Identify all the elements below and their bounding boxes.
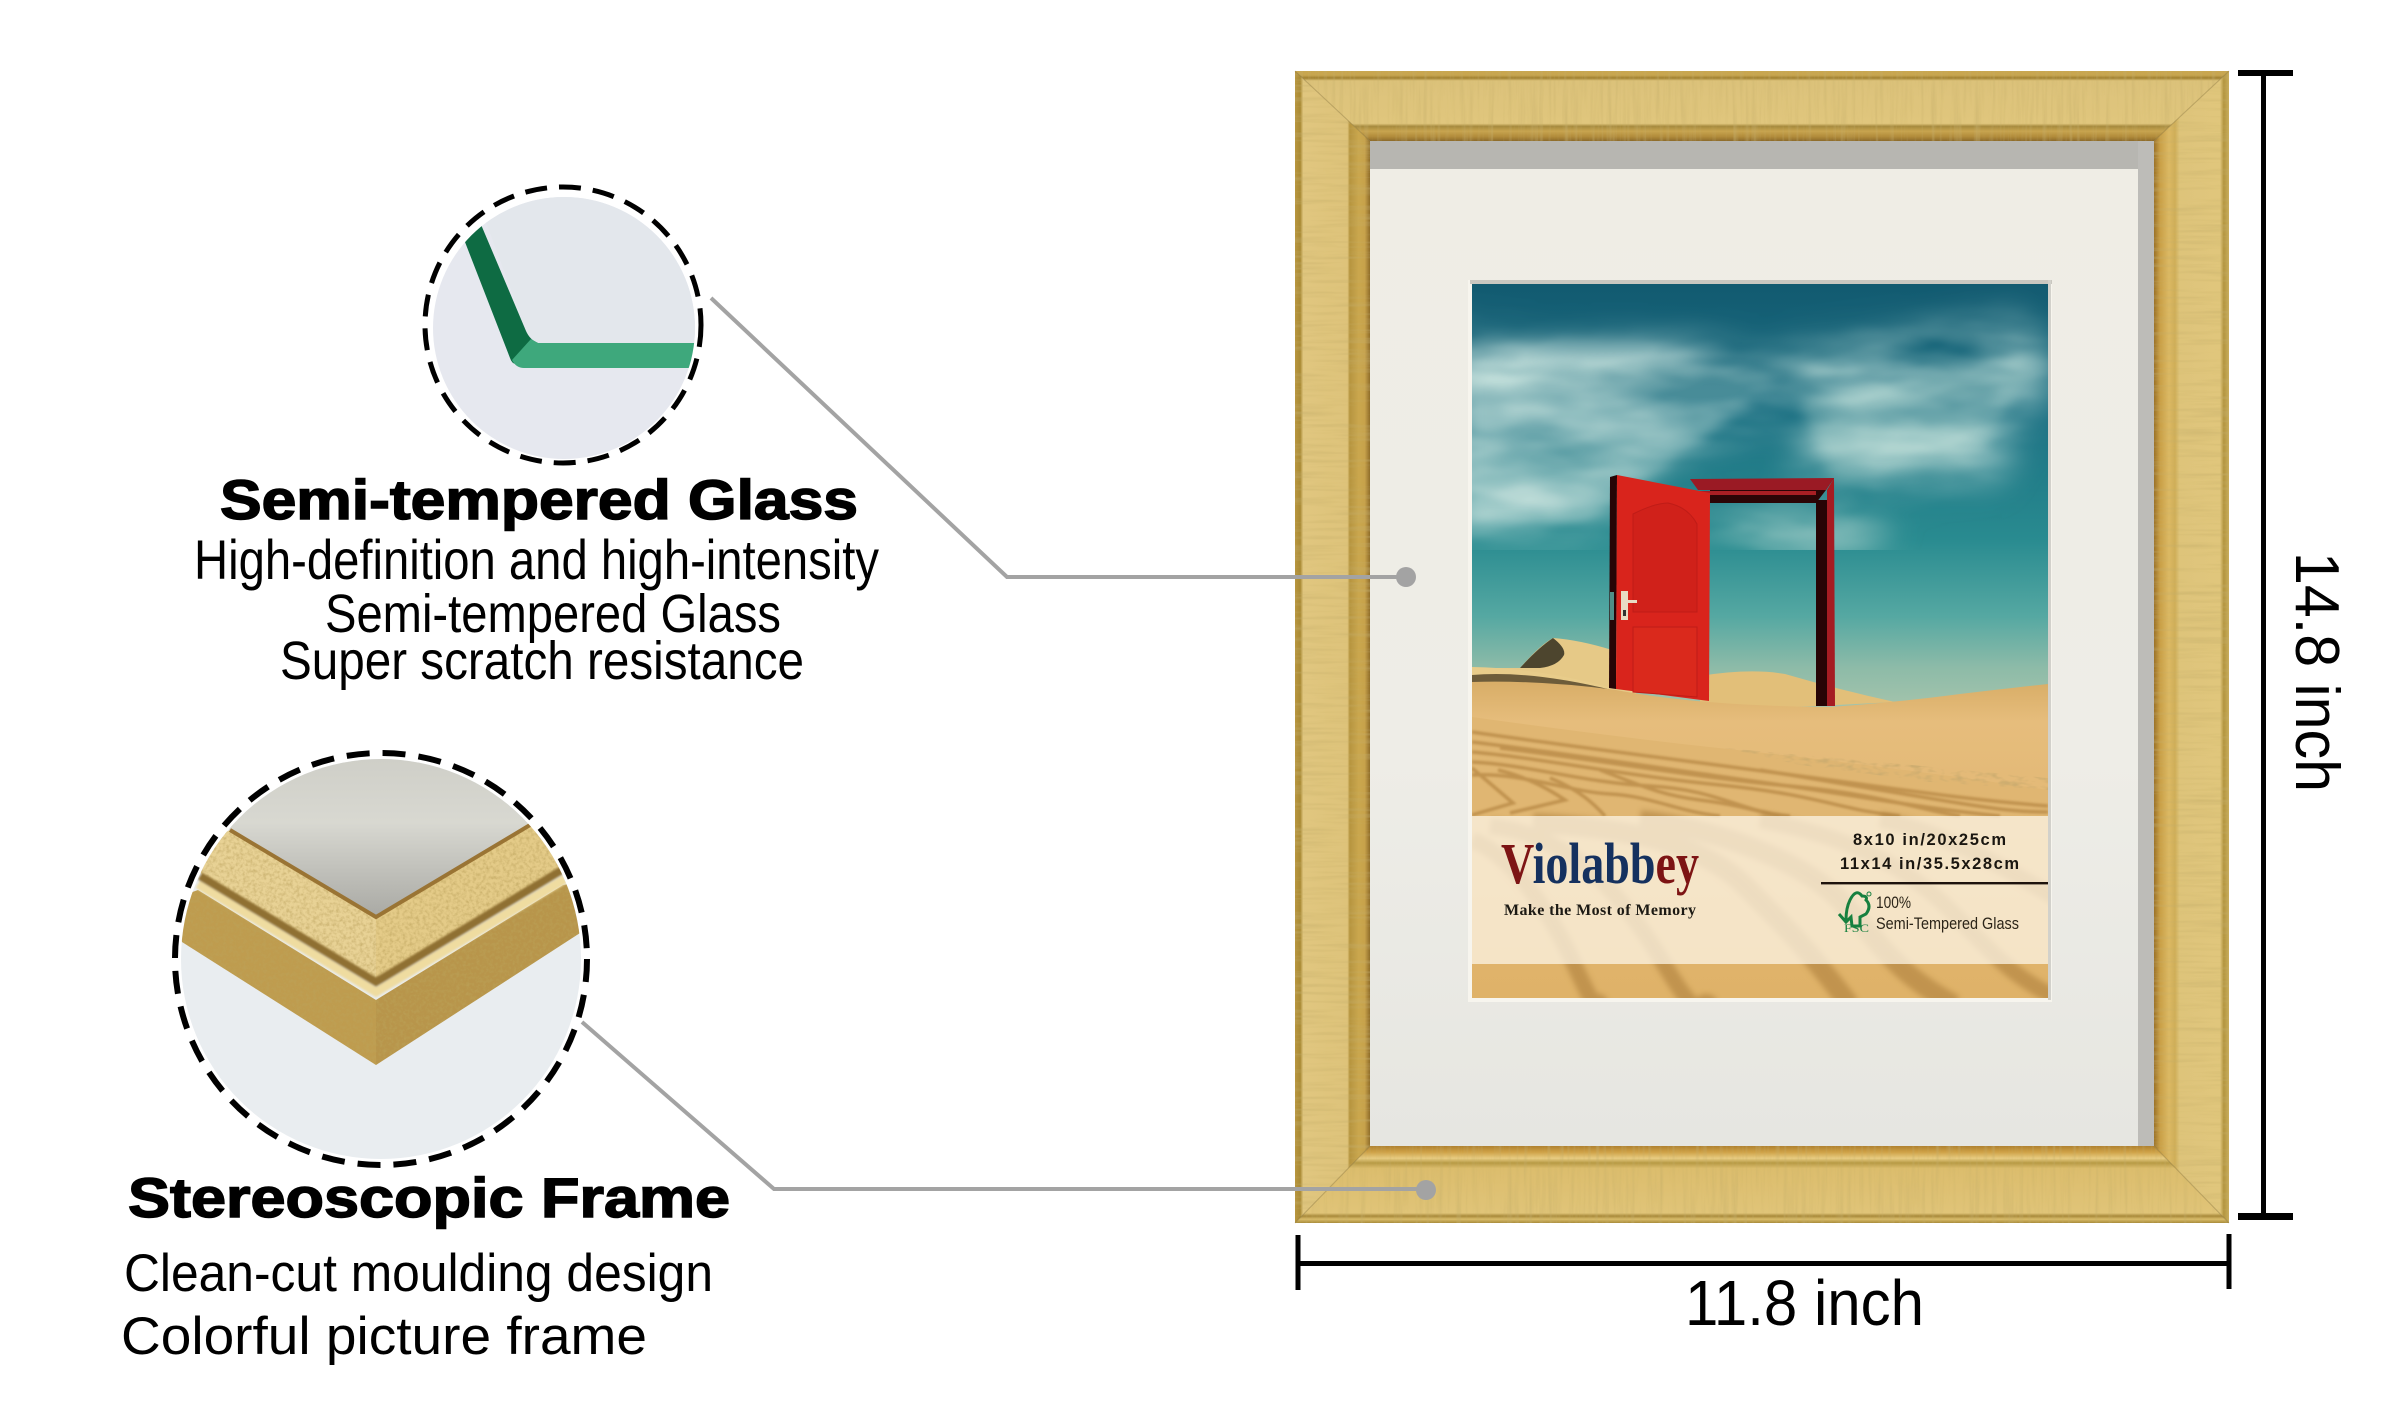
circle fill with frame corner [170, 755, 590, 1165]
mat edge [230, 825, 530, 917]
circle fill with glass corner [430, 190, 700, 470]
door handle [1610, 591, 1637, 620]
label band [1472, 816, 2048, 964]
dimension: height 14.8 inch [2238, 70, 2351, 1220]
text block: Stereoscopic Frame [121, 1166, 730, 1366]
red door and frame [1609, 475, 1835, 706]
size label [1821, 831, 2048, 884]
brand name: Violabbey [1501, 831, 1699, 896]
dimension: width 11.8 inch [1296, 1234, 2232, 1339]
description [194, 528, 879, 691]
door panels [1633, 503, 1697, 697]
glass label: 100% [1876, 893, 1911, 912]
leader line: glass [711, 298, 1416, 587]
ripple dune [1472, 718, 1760, 753]
frame moulding [1295, 71, 2229, 1223]
sky [1472, 284, 2048, 714]
description: Colorful picture frame [121, 1307, 647, 1366]
photo: red door in the desert [1430, 284, 2060, 1007]
lower face [170, 890, 376, 1065]
height label: 14.8 inch [2282, 552, 2351, 792]
mat board [1370, 141, 2154, 1146]
large ripples [1472, 820, 2060, 1007]
heading: Stereoscopic Frame [128, 1166, 730, 1229]
description [121, 1244, 713, 1366]
glass label [1876, 896, 2018, 932]
callout: frame circle [170, 753, 590, 1165]
door edge [1609, 475, 1617, 689]
icon: FSC tree [1839, 892, 1871, 935]
speckled sand [1725, 748, 2048, 790]
icon: FSC tree: FSC [1844, 923, 1869, 935]
description: Semi-tempered Glass [325, 584, 781, 644]
size label: 8x10 in/20x25cm [1853, 831, 2006, 849]
mat window bevel [1468, 280, 2052, 1002]
clouds [1430, 317, 2060, 552]
text block: Semi-tempered Glass [194, 468, 879, 691]
glass label: Semi-Tempered Glass [1876, 914, 2019, 933]
groove and highlight [198, 879, 565, 992]
size label: 11x14 in/35.5x28cm [1840, 855, 2019, 873]
heading: Semi-tempered Glass [220, 468, 858, 531]
brand logo [1502, 842, 1699, 918]
back dunes [1472, 638, 1895, 712]
foreground sand [1472, 682, 2060, 1007]
door leaf [1616, 475, 1710, 701]
dashed border [175, 753, 587, 1165]
leader line: frame [582, 1022, 1436, 1200]
upper face [190, 830, 376, 983]
jamb [1816, 478, 1835, 706]
product: gold picture frame [1295, 71, 2229, 1223]
callout: glass circle [425, 187, 701, 470]
description: Super scratch resistance [280, 631, 804, 691]
dashed border [425, 187, 701, 463]
lintel [1690, 478, 1834, 503]
tagline: Make the Most of Memory [1504, 902, 1696, 919]
width label: 11.8 inch [1685, 1267, 1924, 1339]
description: Clean-cut moulding design [124, 1244, 713, 1303]
description: High-definition and high-intensity [194, 528, 879, 591]
